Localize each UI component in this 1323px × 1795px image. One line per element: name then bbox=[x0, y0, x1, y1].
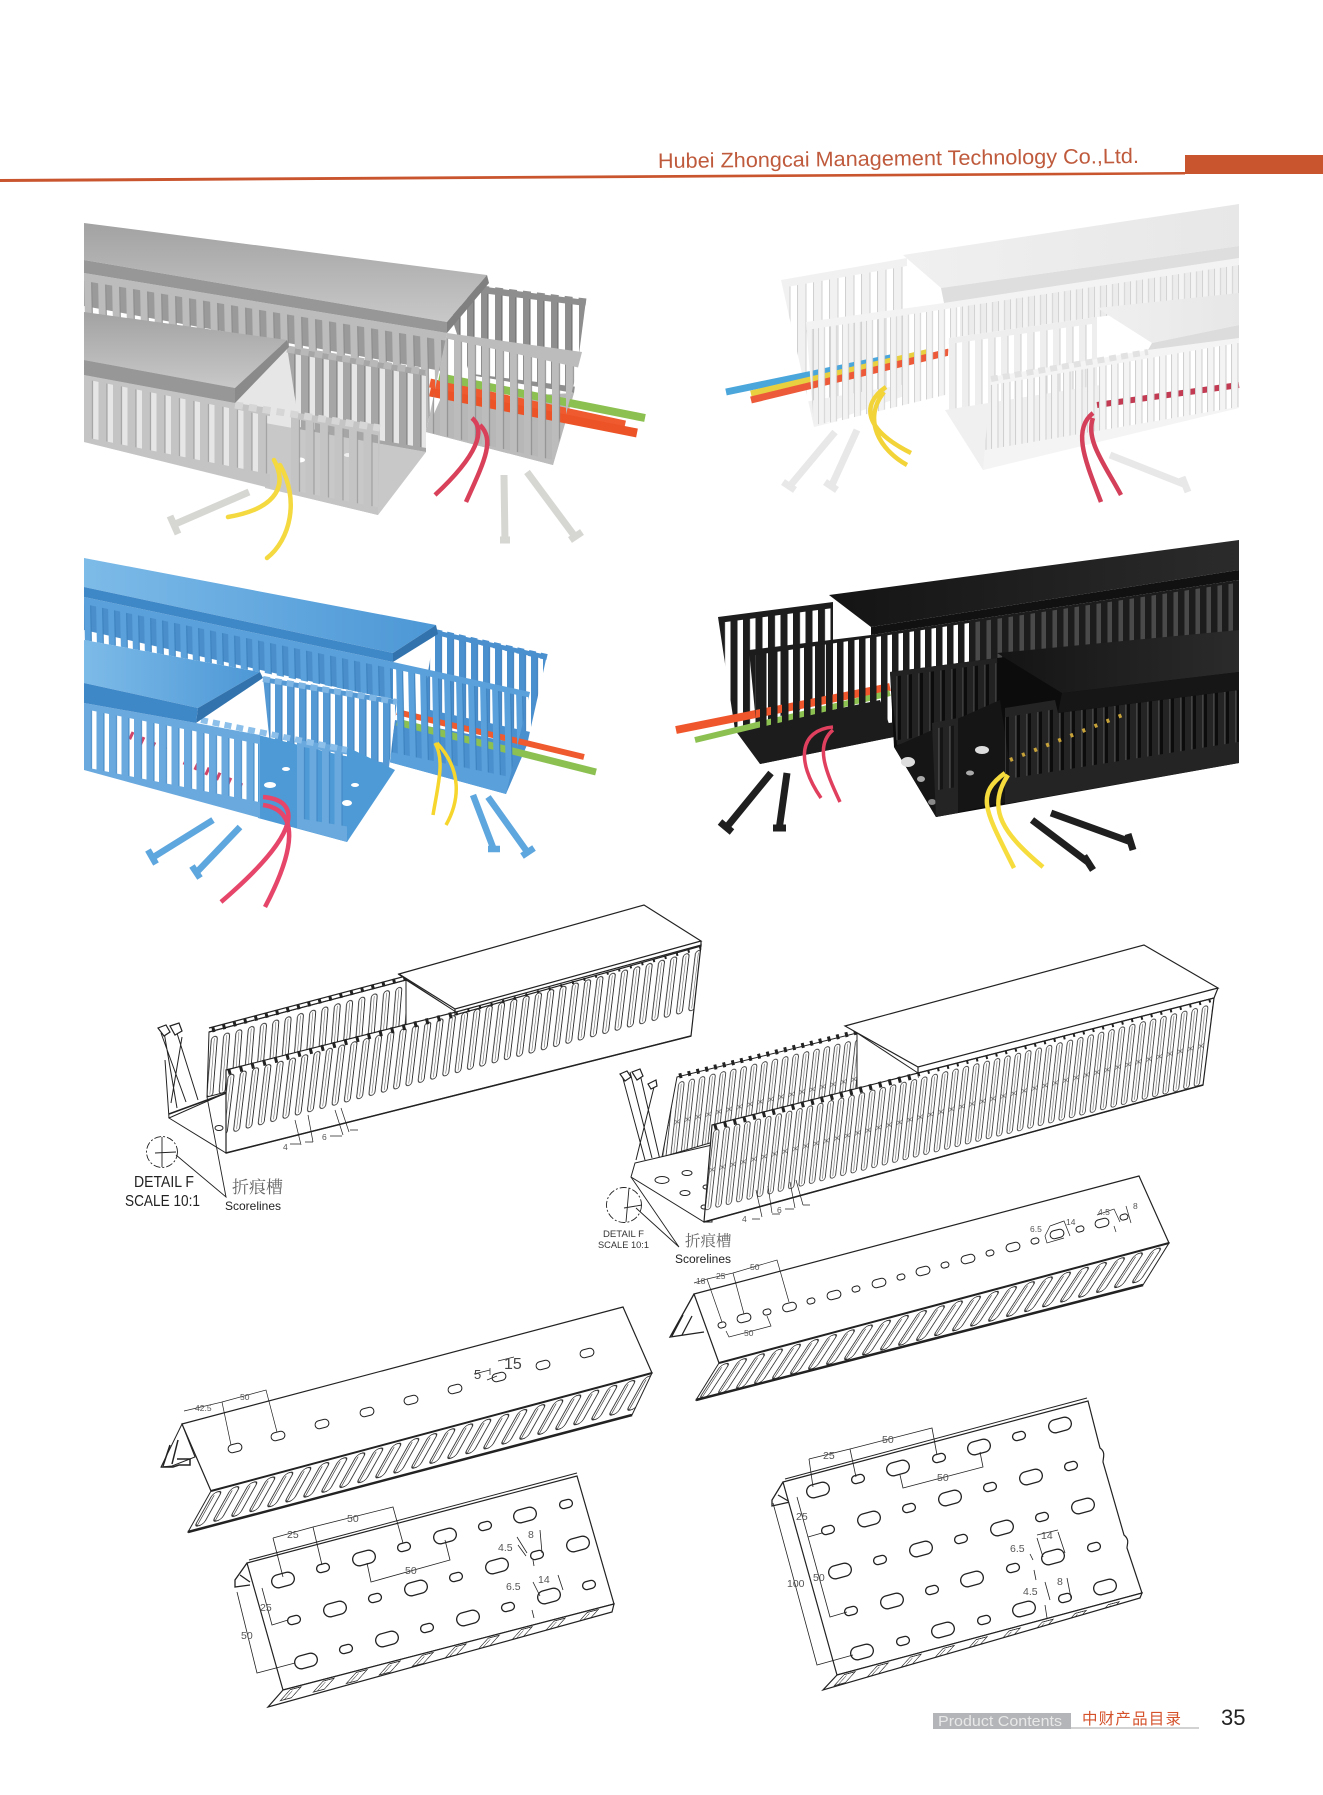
finger clips bbox=[720, 773, 1133, 870]
dimension labels: 50 bbox=[240, 1392, 250, 1402]
finger clips bbox=[783, 430, 1188, 492]
scoreline labels: Scorelines bbox=[675, 1254, 731, 1266]
yellow wires bbox=[228, 460, 291, 558]
drawing: 50 mm base plate bbox=[235, 1473, 614, 1707]
dimension labels: 14 bbox=[1066, 1217, 1076, 1227]
dimension labels: 50 bbox=[882, 1434, 894, 1446]
dimension marks bbox=[184, 1357, 514, 1445]
scoreline labels: 折痕槽 bbox=[685, 1229, 732, 1251]
dimension labels: 6 bbox=[322, 1132, 327, 1142]
detail caption: DETAIL F bbox=[134, 1174, 194, 1191]
dimension labels: 4.5 bbox=[1098, 1207, 1110, 1217]
dimension labels: 15 bbox=[504, 1356, 522, 1373]
photo: grey slotted wiring ducts bbox=[84, 223, 645, 558]
detail circle bbox=[146, 1136, 178, 1168]
detail caption: SCALE 10:1 bbox=[125, 1193, 200, 1210]
header rule bbox=[0, 172, 1185, 182]
cover holes bbox=[717, 1213, 1129, 1329]
dimension labels: 25 bbox=[823, 1450, 835, 1462]
company name: Hubei Zhongcai Management Technology Co.,Ltd. bbox=[658, 145, 1139, 173]
detail caption bbox=[125, 1174, 200, 1210]
detail caption: DETAIL F bbox=[603, 1229, 644, 1240]
dimension labels bbox=[696, 1201, 1138, 1338]
dimension marks bbox=[752, 1180, 810, 1219]
drawing: duct with cover, scorelines detail (left) bbox=[125, 905, 701, 1213]
dimension labels bbox=[283, 1132, 327, 1152]
drawing: 100 mm base plate bbox=[772, 1398, 1142, 1690]
cover holes bbox=[227, 1347, 595, 1454]
detail caption: SCALE 10:1 bbox=[598, 1240, 649, 1251]
dimension labels: 6.5 bbox=[1010, 1543, 1025, 1555]
plate holes bbox=[270, 1498, 596, 1670]
finger clips bbox=[170, 472, 582, 543]
yellow wires bbox=[433, 743, 456, 825]
dimension labels bbox=[742, 1205, 782, 1224]
photo: blue slotted wiring ducts bbox=[84, 558, 596, 907]
scoreline labels: 折痕槽 bbox=[232, 1173, 283, 1198]
dimension labels: 8 bbox=[1057, 1576, 1063, 1588]
scoreline labels bbox=[225, 1173, 283, 1213]
yellow wires bbox=[987, 773, 1043, 868]
dimension labels: 18 bbox=[696, 1276, 706, 1286]
dimension marks bbox=[694, 1206, 1131, 1337]
dimension marks bbox=[290, 1108, 358, 1145]
dimension labels: 50 bbox=[937, 1472, 949, 1484]
dimension labels: 6.5 bbox=[506, 1581, 521, 1593]
dimension labels: 42.5 bbox=[195, 1403, 212, 1413]
page number: 35 bbox=[1221, 1705, 1245, 1730]
detail circle bbox=[606, 1188, 642, 1222]
red wires bbox=[435, 418, 487, 502]
photo: white slotted wiring ducts bbox=[726, 204, 1239, 502]
detail caption bbox=[598, 1229, 649, 1251]
dimension labels: 50 bbox=[744, 1328, 754, 1338]
dimension labels: 25 bbox=[260, 1602, 272, 1614]
dimension labels: 100 bbox=[787, 1578, 805, 1590]
dimension marks bbox=[773, 1428, 1071, 1665]
dimension marks bbox=[237, 1507, 563, 1673]
footer Chinese title: 中财产品目录 bbox=[1082, 1710, 1182, 1728]
dimension labels: 14 bbox=[1041, 1530, 1053, 1542]
dimension labels: 50 bbox=[347, 1513, 359, 1525]
drawing: narrow duct cover (left) bbox=[161, 1307, 652, 1532]
scoreline labels bbox=[675, 1229, 732, 1266]
dimension labels: 8 bbox=[1133, 1201, 1138, 1211]
footer grey tab: Product Contents bbox=[938, 1713, 1062, 1730]
yellow wires bbox=[870, 387, 911, 465]
scoreline labels: Scorelines bbox=[225, 1199, 281, 1213]
dimension labels: 25 bbox=[796, 1511, 808, 1523]
dimension labels: 4.5 bbox=[498, 1542, 513, 1554]
footer rule bbox=[1071, 1727, 1199, 1729]
header colour block bbox=[1185, 155, 1323, 174]
drawing: wide duct cover (right) bbox=[670, 1176, 1169, 1400]
dimension labels: 6.5 bbox=[1030, 1224, 1042, 1234]
header: company name and rule bbox=[0, 145, 1323, 182]
dimension labels: 4.5 bbox=[1023, 1586, 1038, 1598]
dimension labels: 25 bbox=[287, 1529, 299, 1541]
dimension labels: 5 bbox=[474, 1367, 481, 1382]
dimension labels: 25 bbox=[716, 1271, 726, 1281]
dimension labels: 4 bbox=[283, 1142, 288, 1152]
dimension labels bbox=[787, 1434, 1063, 1598]
dimension labels: 50 bbox=[241, 1630, 253, 1642]
dimension labels: 50 bbox=[405, 1565, 417, 1577]
dimension labels: 4 bbox=[742, 1214, 747, 1224]
plate holes bbox=[805, 1416, 1118, 1661]
dimension labels: 14 bbox=[538, 1574, 550, 1586]
dimension labels: 50 bbox=[813, 1572, 825, 1584]
dimension labels bbox=[241, 1513, 550, 1642]
red wires bbox=[221, 797, 289, 907]
dimension labels: 50 bbox=[750, 1262, 760, 1272]
photo: black slotted wiring ducts bbox=[676, 540, 1239, 870]
drawing: duct with cover, scorelines detail (right) bbox=[598, 945, 1218, 1266]
footer: product contents and page number bbox=[933, 1705, 1245, 1730]
dimension labels bbox=[195, 1356, 522, 1413]
finger clips bbox=[148, 795, 534, 878]
dimension labels: 6 bbox=[777, 1205, 782, 1215]
dimension labels: 8 bbox=[528, 1529, 534, 1541]
red wires bbox=[804, 727, 840, 802]
red wires bbox=[1082, 413, 1121, 502]
